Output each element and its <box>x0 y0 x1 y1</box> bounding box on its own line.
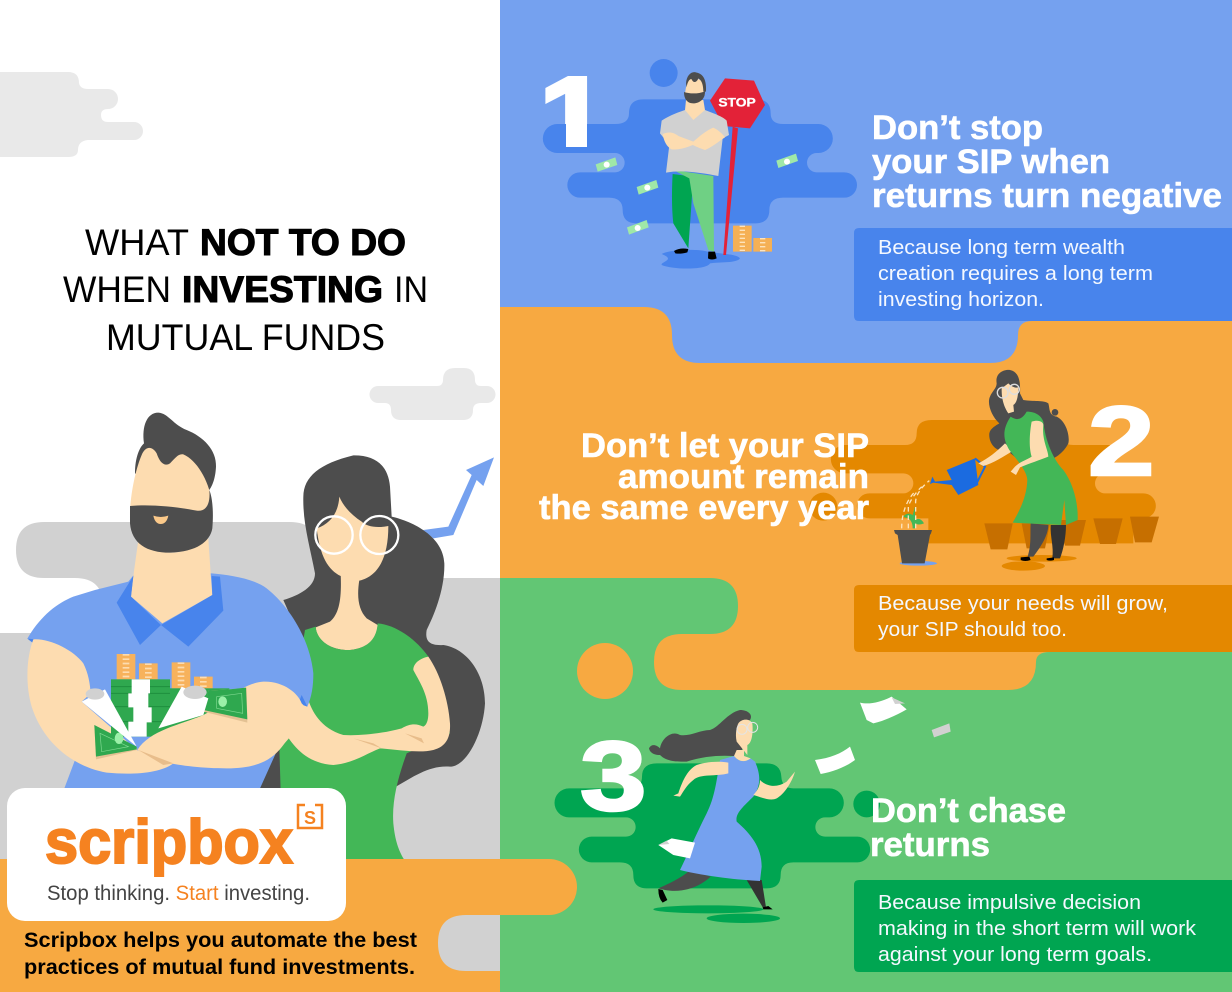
footer text <box>24 929 417 979</box>
text panel: step 3 <box>854 880 1232 972</box>
logo icon <box>298 805 322 828</box>
running woman <box>649 710 795 909</box>
heading: step 2: the same every year <box>539 489 869 527</box>
tagline: Stop thinking. Start investing. <box>47 882 310 905</box>
title: WHEN <box>63 269 171 310</box>
number 3: 3 <box>580 722 646 832</box>
title <box>63 222 428 358</box>
title: INVESTING <box>182 269 383 310</box>
text panel: step 3: against your long term goals. <box>878 944 1152 966</box>
cloud: top left <box>0 72 143 157</box>
shadow <box>653 905 780 923</box>
arrow: rising trend <box>423 457 494 538</box>
banknotes <box>596 154 798 235</box>
text panel: step 1: creation requires a long term <box>878 263 1153 285</box>
text panel: step 1 <box>854 228 1232 321</box>
text panel: step 3: Because impulsive decision <box>878 892 1141 914</box>
step 3 illustration <box>555 697 951 923</box>
text panel: step 1: Because long term wealth <box>878 237 1125 259</box>
heading: step 3: Don’t chase <box>871 792 1066 830</box>
man's right arm <box>137 682 308 768</box>
man <box>660 72 729 259</box>
gray background shapes <box>0 522 500 992</box>
stop sign: STOP <box>718 96 756 110</box>
woman <box>978 370 1078 571</box>
title: MUTUAL FUNDS <box>106 317 385 358</box>
text panel: step 2 <box>854 585 1232 652</box>
step 2 illustration <box>809 370 1159 571</box>
text panel: step 1: investing horizon. <box>878 289 1044 311</box>
title: NOT TO DO <box>200 222 406 263</box>
orange circle <box>577 643 633 699</box>
blob <box>555 763 870 888</box>
heading: step 3: returns <box>870 826 990 864</box>
banknotes and paper fans <box>82 686 247 759</box>
panel: step 1 blue background <box>500 0 1232 370</box>
heading: step 1: your SIP when <box>872 143 1110 181</box>
flying papers <box>658 697 951 858</box>
stop sign <box>710 78 765 255</box>
footer band: orange <box>0 859 577 992</box>
heading: step 2: Don’t let your SIP <box>581 427 869 465</box>
illustration: couple holding money <box>27 413 494 859</box>
plant pot <box>894 481 937 566</box>
watering can <box>930 458 985 495</box>
text panel: step 2: Because your needs will grow, <box>878 593 1168 615</box>
number 1: 1 <box>540 58 606 168</box>
footer text: practices of mutual fund investments. <box>24 956 415 979</box>
text panel: step 3: making in the short term will work <box>878 918 1197 940</box>
heading: step 2: amount remain <box>618 458 869 496</box>
title: IN <box>394 269 428 310</box>
logo card <box>7 788 346 921</box>
title: WHAT <box>85 222 189 263</box>
heading: step 1 <box>872 109 1222 215</box>
text panel: step 2: your SIP should too. <box>878 619 1067 641</box>
woman <box>255 455 485 859</box>
heading: step 1: returns turn negative <box>872 177 1222 215</box>
cloud: middle <box>370 368 496 420</box>
logo icon: S <box>304 808 316 828</box>
man <box>27 413 313 788</box>
man's left arm <box>27 639 173 774</box>
logo wordmark: scripbox <box>45 808 293 877</box>
footer text: Scripbox helps you automate the best <box>24 929 417 952</box>
heading: step 1: Don’t stop <box>872 109 1043 147</box>
step 1 illustration <box>543 59 857 269</box>
blob <box>543 99 857 223</box>
blob <box>831 420 1156 543</box>
heading: step 3 <box>870 792 1066 864</box>
panel: step 2 orange background <box>500 307 1232 690</box>
shadow <box>662 250 740 269</box>
heading: step 2 <box>539 427 869 527</box>
pots <box>984 517 1159 549</box>
coins <box>742 226 763 252</box>
coins and banknote stack <box>111 654 229 737</box>
number 2: 2 <box>1088 387 1154 497</box>
panel: step 3 green background <box>500 570 1232 992</box>
